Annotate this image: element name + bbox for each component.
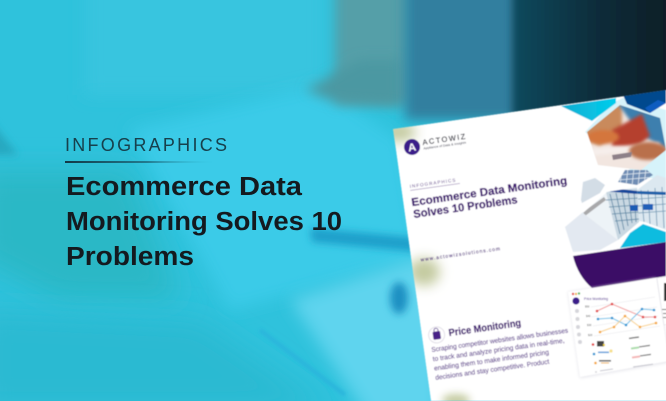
window dots — [572, 292, 580, 295]
logo mark: A — [407, 141, 417, 154]
series: blue — [597, 308, 655, 326]
section body: enabling them to make informed pricing — [434, 349, 550, 373]
axis labels: $30 — [587, 323, 592, 327]
light cyan backing strip — [585, 98, 666, 178]
cyan top hexagon — [561, 98, 616, 121]
pale large hexagon — [565, 212, 618, 252]
dashboard card: side panel — [657, 275, 666, 325]
price table — [592, 336, 653, 373]
series: orange — [599, 315, 657, 333]
cyan bottom hexagon — [620, 224, 666, 248]
tilted infographic page preview — [380, 88, 666, 401]
axis labels — [585, 304, 593, 337]
soft olive blotches — [392, 126, 474, 401]
section heading: Price Monitoring — [448, 318, 522, 339]
underline rule — [65, 161, 215, 163]
photo hexagon: cart right — [636, 174, 666, 232]
eyebrow: INFOGRAPHICS — [409, 178, 456, 189]
sidebar icons — [572, 297, 582, 344]
graphic: hexagon collage — [561, 89, 666, 288]
title: Problems — [66, 243, 194, 271]
title — [66, 173, 342, 271]
page title: Ecommerce Data Monitoring — [411, 175, 568, 209]
icon: shopping bag — [428, 326, 446, 344]
section body: decisions and stay competitive. Product — [435, 359, 550, 382]
heading block — [65, 135, 342, 271]
section body — [431, 327, 573, 382]
series: red — [596, 303, 656, 318]
section body: Scraping competitor websites allows businesses — [431, 327, 569, 354]
label: infographics: INFOGRAPHICS — [65, 135, 227, 155]
dashboard card: price monitoring chart — [568, 278, 666, 378]
page text, rotated with the page — [403, 133, 568, 380]
logo tagline: Appliance of Data & Insights — [423, 140, 467, 150]
title: Monitoring Solves 10 — [66, 208, 342, 236]
section: price monitoring — [428, 320, 568, 380]
chart title: Price Monitoring — [584, 297, 608, 301]
axis labels: $40 — [586, 314, 591, 318]
logo: Actowiz — [403, 131, 467, 156]
logo wordmark: ACTOWIZ — [422, 132, 466, 147]
purple footer band — [573, 242, 666, 288]
line chart — [584, 302, 658, 336]
section body: to track and analyze pricing data in real-time, — [432, 338, 565, 363]
page title: Solves 10 Problems — [413, 194, 518, 221]
dark blue top hexagon — [623, 89, 666, 113]
photo hexagon: cart top — [618, 169, 654, 186]
photo hexagon: hands and phone — [585, 104, 666, 172]
axis labels: $50 — [585, 304, 590, 308]
axis labels: $20 — [588, 333, 593, 337]
eyebrow rule — [410, 183, 460, 191]
photo hexagon: shopping cart — [583, 187, 640, 240]
grey small hexagon — [581, 178, 605, 203]
website url: www.actowizsolutions.com — [420, 246, 500, 263]
title: Ecommerce Data — [66, 173, 303, 201]
